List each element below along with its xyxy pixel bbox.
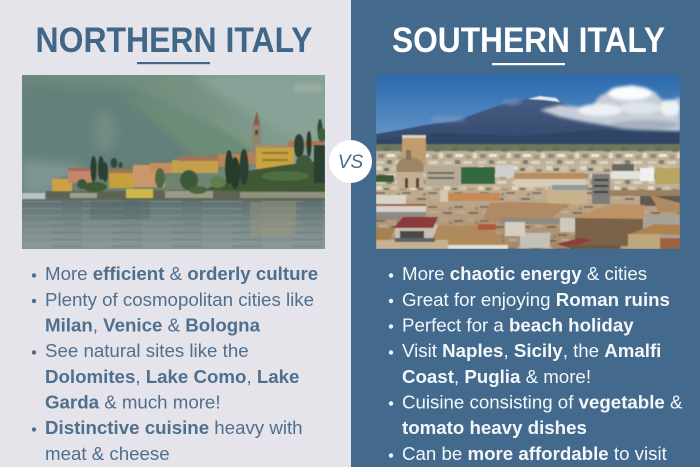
bullet item: places	[389, 340, 661, 387]
bullet item: cuisine	[32, 417, 303, 464]
bullet item: ruins: Great for enjoying Roman ruins	[402, 289, 670, 310]
bullet item: cuisine: Cuisine consisting of vegetable &	[402, 392, 683, 412]
bullet item: cuisine: Distinctive cuisine heavy with	[45, 417, 303, 438]
bullet item: cuisine	[389, 392, 683, 438]
bullet item: natural sites: Dolomites, Lake Como, Lake	[45, 366, 299, 387]
panel: southern italy background	[351, 0, 700, 467]
photo: volcano over city	[376, 75, 682, 249]
bullet item: cities: Plenty of cosmopolitan cities like	[45, 289, 314, 310]
cypress trees	[90, 156, 96, 182]
vs badge	[329, 140, 372, 183]
yellow palazzo	[256, 147, 294, 169]
heading underline: southern	[492, 63, 565, 65]
mid buildings	[547, 186, 587, 204]
terracotta roofs	[483, 202, 570, 222]
bullet item: places: Coast, Puglia & more!	[402, 366, 591, 387]
bullet item: places: Visit Naples, Sicily, the Amalfi	[402, 340, 661, 361]
photo: lakeside village	[22, 75, 326, 250]
foreground roofs	[376, 228, 395, 240]
heading underline: northern	[137, 62, 210, 64]
bullet item: cuisine: meat & cheese	[45, 443, 170, 464]
heading: northern italy: NORTHERN ITALY	[36, 21, 312, 60]
bullet item: beach: Perfect for a beach holiday	[402, 314, 634, 336]
white building beside church	[425, 166, 461, 186]
vs badge: VS	[338, 152, 363, 173]
bullet item: energy: More chaotic energy & cities	[402, 263, 647, 284]
panel: northern italy background	[0, 0, 351, 467]
sea wall	[46, 190, 325, 201]
long roofed building	[515, 173, 585, 179]
green park	[461, 167, 495, 184]
hill behind village	[52, 150, 250, 192]
bullet item: natural sites: See natural sites like the	[45, 340, 249, 361]
bullet item: natural sites	[32, 340, 299, 412]
domed church	[396, 156, 424, 172]
bell tower	[252, 125, 261, 155]
red roof house	[395, 224, 437, 240]
volcano	[376, 98, 680, 140]
bullet item: cities	[32, 289, 314, 336]
bullet item: cuisine: tomato heavy dishes	[402, 417, 587, 438]
city base	[376, 144, 680, 249]
clouds	[430, 85, 680, 131]
bullet item: natural sites: Garda & much more!	[45, 392, 221, 412]
bullet item: cities: Milan, Venice & Bologna	[45, 314, 261, 336]
gardens	[205, 160, 325, 192]
village buildings	[52, 179, 72, 191]
heading: southern italy: SOUTHERN ITALY	[392, 21, 665, 60]
grey apartments	[592, 174, 610, 204]
list: northern italy features	[32, 263, 318, 464]
bullet item: culture: More efficient & orderly culture	[45, 263, 318, 284]
modern tower	[402, 137, 426, 167]
shore haze	[22, 193, 45, 200]
bullet item: affordable: Can be more affordable to visit	[402, 443, 668, 464]
list: southern italy features	[389, 263, 683, 464]
water	[22, 199, 325, 249]
brick building	[575, 218, 643, 246]
